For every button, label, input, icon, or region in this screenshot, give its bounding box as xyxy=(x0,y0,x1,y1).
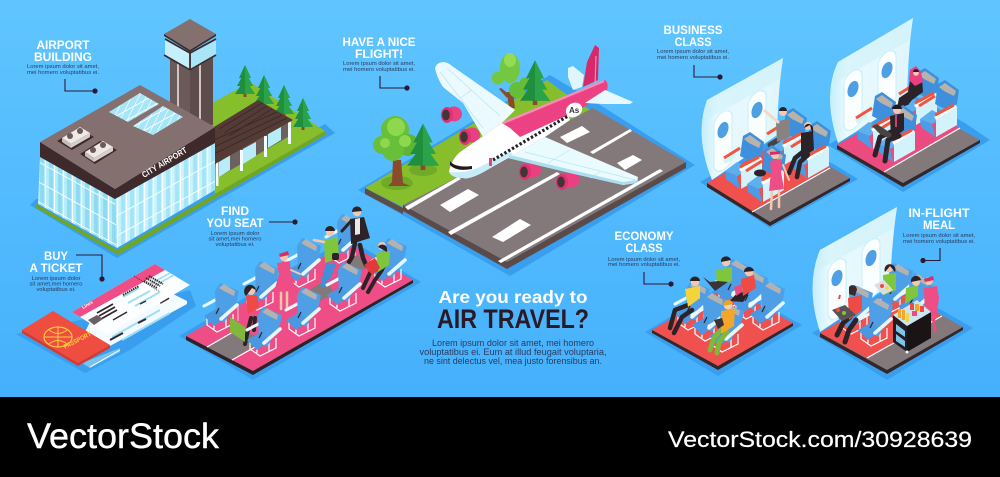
heading: have a nice flight: FLIGHT! xyxy=(355,47,403,61)
person: woman with suitcase xyxy=(230,285,259,344)
cabin wall xyxy=(830,18,913,143)
heading: airport building: AIRPORT xyxy=(36,38,90,52)
cockpit window xyxy=(450,161,472,170)
seats xyxy=(724,108,831,189)
heading: find you seat: Lorem ipsum dolor xyxy=(210,231,260,237)
leader: nice flight xyxy=(380,76,410,91)
heading: buy a ticket xyxy=(30,249,83,293)
main title block: Are you ready to xyxy=(438,287,588,307)
grass xyxy=(365,80,590,207)
tail fin xyxy=(583,45,599,87)
passport: PASSPORT xyxy=(63,331,93,351)
upper ticket xyxy=(72,264,190,334)
panel: business class 1 xyxy=(700,58,858,228)
heading: have a nice flight: Lorem ipsum dolor sit amet, xyxy=(343,61,416,67)
heading: buy a ticket: A TICKET xyxy=(30,261,83,275)
main title block xyxy=(420,287,606,367)
bag xyxy=(754,170,766,176)
person: man in green with backpack xyxy=(314,226,339,285)
control tower xyxy=(164,19,216,125)
passenger: child xyxy=(905,276,921,304)
seats near row xyxy=(247,238,407,356)
flight attendant xyxy=(274,251,300,309)
sign: city airport: CITY AIRPORT xyxy=(140,144,189,180)
panel: economy class xyxy=(645,256,802,376)
engines xyxy=(441,106,580,190)
footer bar xyxy=(0,397,1000,477)
passenger: man with laptop xyxy=(872,105,904,161)
person: woman seated with red bag xyxy=(363,242,390,292)
annex with striped roof xyxy=(214,100,293,186)
heading: in-flight meal: IN-FLIGHT xyxy=(908,206,970,220)
flight attendant xyxy=(924,276,939,331)
panel: ticket and passport xyxy=(16,264,196,373)
main title block: voluptatibus ei. Eum at illud feugait voluptaria, xyxy=(420,347,606,358)
heading: in-flight meal xyxy=(903,206,976,245)
leader: business class xyxy=(694,65,723,80)
heading: find you seat: FIND xyxy=(221,204,249,218)
panel: business class 2 xyxy=(828,18,990,192)
footer logo: VectorStock xyxy=(27,417,220,456)
fuselage xyxy=(449,80,608,178)
main title block: AIR TRAVEL? xyxy=(437,304,589,334)
seats front row xyxy=(675,281,744,352)
runway markings xyxy=(405,126,663,263)
footer url: VectorStock.com/30928639 xyxy=(668,427,972,452)
seats back row xyxy=(716,259,785,330)
passenger: orange top with tablet xyxy=(710,300,735,353)
cabin wall xyxy=(812,207,897,332)
heading: find you seat: YOU SEAT xyxy=(206,216,264,230)
rooftop AC units xyxy=(57,127,117,164)
skylights xyxy=(109,93,183,135)
rear stabilizer far xyxy=(568,66,584,90)
leader: buy a ticket xyxy=(76,255,105,282)
seats far row xyxy=(204,214,361,332)
person: man in black xyxy=(342,206,370,265)
heading: buy a ticket: BUY xyxy=(44,249,68,263)
seats front row xyxy=(838,285,893,346)
front seat xyxy=(746,145,786,202)
heading: economy class: Lorem ipsum dolor sit amet, xyxy=(608,257,681,263)
heading: airport building: mei homero voluptatibus ei. xyxy=(27,70,99,76)
heading: economy class xyxy=(608,229,681,268)
heading: have a nice flight: mei homero voluptatibus ei. xyxy=(343,67,415,73)
seats xyxy=(899,68,959,137)
main title block: Lorem ipsum dolor sit amet, mei homero xyxy=(432,338,594,349)
front seats xyxy=(856,92,917,162)
cabin wall xyxy=(702,58,783,180)
heading: economy class: CLASS xyxy=(626,241,662,255)
plane xyxy=(435,45,638,190)
leader: in-flight meal xyxy=(920,248,940,263)
passenger: yellow shirt xyxy=(670,276,700,333)
heading: business class: mei homero voluptatibus ei. xyxy=(657,55,729,61)
passenger: red shirt with book xyxy=(730,267,756,302)
heading: business class: Lorem ipsum dolor sit amet, xyxy=(657,49,730,55)
lower ticket xyxy=(85,285,187,346)
heading: in-flight meal: MEAL xyxy=(923,218,955,232)
heading: in-flight meal: Lorem ipsum dolor sit amet, xyxy=(903,233,976,239)
upper ticket: Lines xyxy=(81,299,94,310)
passenger: woman with hijab xyxy=(897,66,923,108)
heading: buy a ticket: sit amet,mei homero xyxy=(30,282,82,288)
heading: in-flight meal: mei homero voluptatibus ei. xyxy=(903,239,975,245)
flight attendant xyxy=(769,151,789,209)
tail logo xyxy=(563,100,585,120)
heading: business class: CLASS xyxy=(674,35,712,49)
passenger: woman in black xyxy=(789,122,814,177)
heading: airport building: BUILDING xyxy=(34,50,92,64)
seats back row xyxy=(878,263,933,322)
heading: buy a ticket: Lorem ipsum dolor xyxy=(32,276,81,282)
heading: buy a ticket: voluptatibus ei. xyxy=(36,287,76,293)
leader: find you seat xyxy=(269,219,298,225)
heading: economy class: ECONOMY xyxy=(614,229,674,243)
panel: find your seat xyxy=(179,206,421,380)
passenger: woman in green xyxy=(874,264,896,295)
runway surface xyxy=(403,108,686,262)
passport xyxy=(22,311,120,368)
windows row xyxy=(493,116,568,160)
passenger: green shirt with laptop xyxy=(703,256,732,291)
trees behind terminal xyxy=(235,65,313,130)
tail logo: As xyxy=(569,106,580,115)
glass walls xyxy=(38,157,117,248)
grass lot behind terminal xyxy=(209,82,325,195)
heading: economy class: mei homero voluptatibus ei. xyxy=(608,262,680,268)
roof and fascia xyxy=(40,127,215,199)
near stabilizer xyxy=(585,90,633,104)
heading: find you seat: voluptatibus ei. xyxy=(216,242,254,248)
aisle xyxy=(207,255,367,360)
panel: in-flight meal xyxy=(812,207,973,380)
panel: airport building xyxy=(30,19,335,258)
heading: have a nice flight: HAVE A NICE xyxy=(342,35,416,49)
passenger: man in vest xyxy=(765,107,790,145)
near wing xyxy=(508,137,638,185)
trees by runway xyxy=(373,53,550,190)
heading: find you seat xyxy=(206,204,264,248)
heading: find you seat: sit amet,mei homero xyxy=(208,236,262,242)
heading: business class xyxy=(657,23,730,61)
heading: airport building: Lorem ipsum dolor sit amet, xyxy=(27,64,100,70)
heading: business class: BUSINESS xyxy=(664,23,722,37)
panel: runway and plane xyxy=(358,45,695,276)
leader: airport building xyxy=(65,79,98,94)
passenger: bearded man xyxy=(832,285,862,342)
far wing xyxy=(435,62,515,137)
heading: have a nice flight xyxy=(342,35,416,73)
main title block: ne sint delectus vel, mea justo forensibus an. xyxy=(424,356,602,367)
heading: airport building xyxy=(27,38,100,76)
meal trolley xyxy=(893,300,931,354)
leader: economy class xyxy=(644,272,674,287)
